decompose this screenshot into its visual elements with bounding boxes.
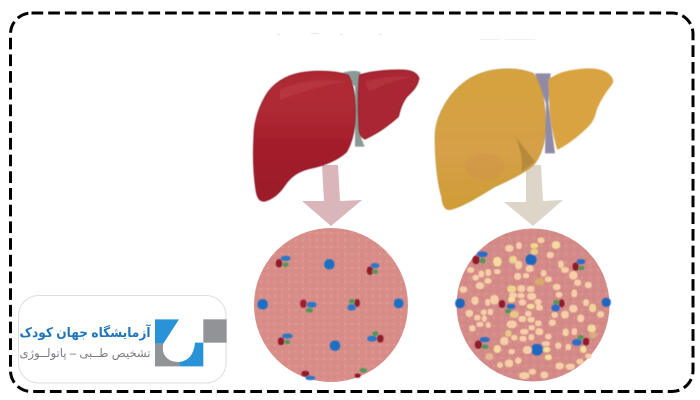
faint caption remnants bbox=[277, 33, 535, 40]
central veins bbox=[456, 255, 610, 355]
right lobe bbox=[358, 70, 419, 139]
fat droplets bbox=[460, 238, 604, 379]
logo mark bbox=[155, 319, 227, 366]
portal triads bbox=[473, 252, 589, 348]
ligament bbox=[535, 73, 555, 153]
healthy tissue circle bbox=[254, 228, 408, 382]
fatty tissue circle bbox=[456, 228, 610, 382]
reddish tint bbox=[465, 153, 505, 180]
central veins bbox=[258, 260, 403, 350]
highlight bbox=[280, 80, 347, 100]
right lobe bbox=[548, 68, 613, 150]
healthy red liver bbox=[253, 70, 419, 201]
shadow fold bbox=[515, 136, 535, 172]
grey lower shape bbox=[155, 344, 179, 366]
left lobe bbox=[253, 71, 355, 201]
portal triads bbox=[276, 256, 383, 380]
logo panel bbox=[18, 296, 227, 383]
left lobe bbox=[435, 69, 545, 210]
logo tagline: تشخیص طــبی – پاتولــوژی bbox=[19, 347, 150, 361]
grey square bbox=[203, 319, 227, 343]
blue upper shape bbox=[155, 319, 179, 344]
arrow: healthy liver to tissue bbox=[302, 165, 362, 226]
logo name: آزمایشگاه جهان کودک bbox=[20, 324, 151, 340]
fatty yellow liver bbox=[435, 68, 613, 210]
ligament bbox=[343, 71, 365, 147]
blue lower shape bbox=[179, 343, 203, 366]
arrow: fatty liver to tissue bbox=[504, 165, 563, 226]
